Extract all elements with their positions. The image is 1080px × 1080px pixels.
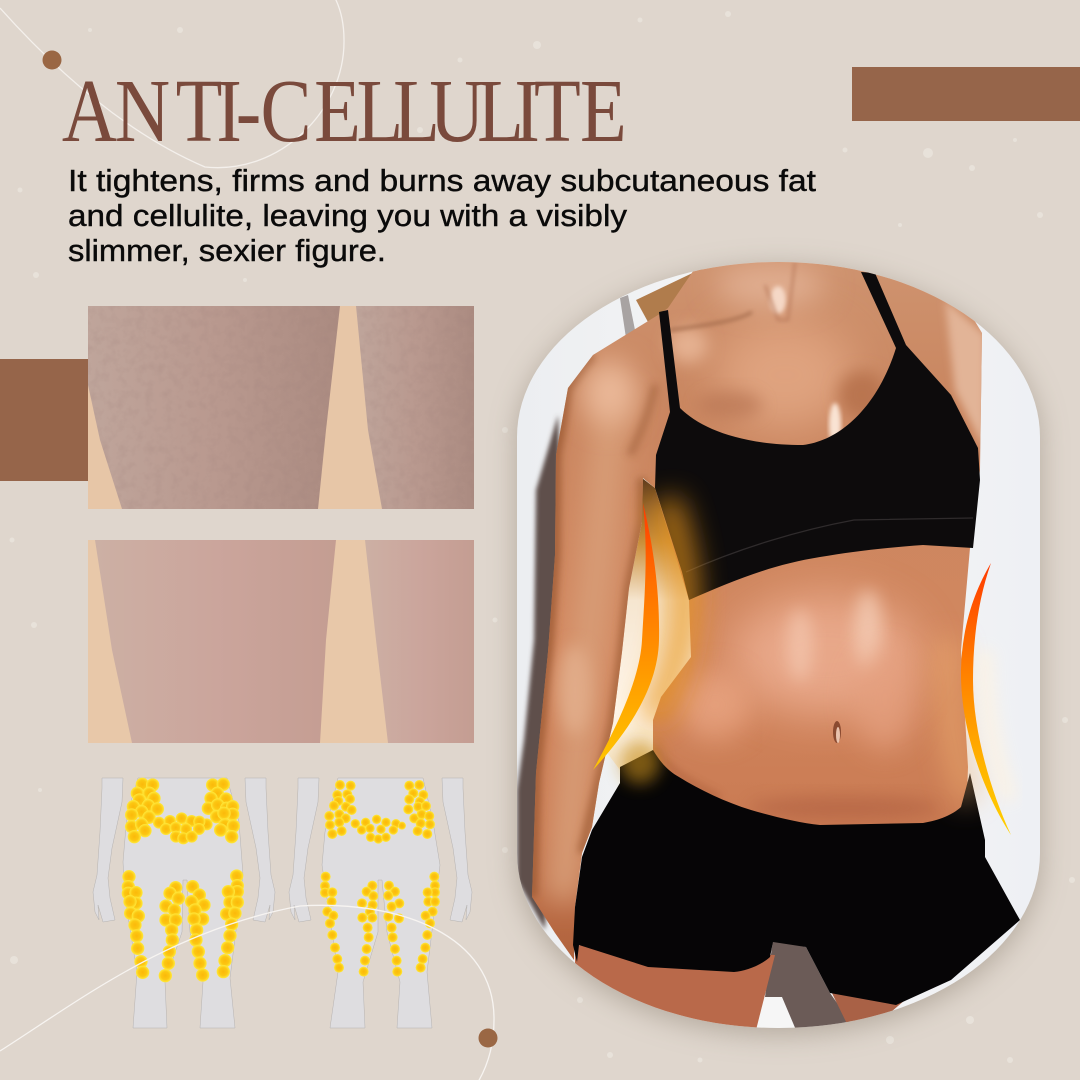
- accent dot: bottom: [478, 1028, 498, 1048]
- wall shadow between legs: [765, 940, 852, 1030]
- description text: It tightens, firms and burns away subcutaneous fat: [68, 163, 816, 198]
- title: ANTI-CELLULITE: [62, 62, 627, 161]
- decorative bar: top right: [852, 67, 1080, 121]
- black shorts: [573, 750, 1020, 1005]
- silhouette: body after: [289, 778, 472, 1028]
- black sports bra: [655, 272, 980, 600]
- heat arc: left: [593, 503, 659, 770]
- photo shadow: [517, 268, 1040, 1034]
- wall shadow: [517, 415, 565, 930]
- photo: thighs after, smooth skin: [88, 540, 474, 743]
- description text: slimmer, sexier figure.: [68, 233, 386, 268]
- fat deposits: body after: [320, 780, 440, 977]
- description text: [68, 163, 816, 268]
- fat deposits: body before: [122, 778, 244, 982]
- thighs: [575, 945, 905, 1030]
- diagram: body before, larger fat deposits: [93, 778, 275, 1028]
- accent dot: top left: [42, 50, 62, 70]
- gap between arm and waist, lit by heat glow: [605, 478, 692, 770]
- silhouette: body before: [93, 778, 275, 1028]
- photo: woman's toned torso in arched frame: [517, 255, 1040, 1030]
- decorative curve: bottom: [0, 905, 498, 1080]
- description text: and cellulite, leaving you with a visibly: [68, 198, 628, 233]
- diagram: body after, reduced fat deposits: [289, 778, 472, 1028]
- hair: [620, 268, 703, 338]
- navel: [833, 721, 841, 743]
- heat glow: [620, 500, 1010, 800]
- left arm and torso skin: [532, 262, 982, 960]
- skin shading: [532, 262, 985, 900]
- decorative curve: top left: [0, 0, 344, 168]
- decorative bar: left: [0, 359, 88, 481]
- photo backdrop: [517, 262, 1040, 1028]
- heat arc: right: [961, 563, 1011, 835]
- photo: thighs before, with cellulite: [88, 306, 474, 509]
